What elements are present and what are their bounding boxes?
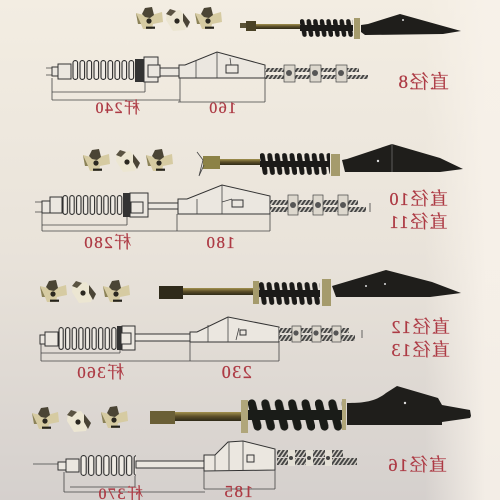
label: diameter 13: 直径13	[390, 340, 450, 360]
label: 180: 180	[205, 233, 235, 252]
label: diameter 16: 直径16	[387, 455, 447, 475]
label: rod 240: 杆240	[94, 99, 140, 117]
panel: diameter 16	[32, 386, 471, 500]
icon: clamps row 4	[32, 406, 128, 432]
icon: clamps row 1	[136, 7, 222, 31]
label: diameter 8: 直径8	[397, 71, 449, 93]
panel: diameter 10 and 11	[35, 144, 463, 252]
label: 230: 230	[220, 362, 252, 382]
icon: clamps row 2	[83, 149, 173, 172]
icon: clamps row 3	[40, 280, 130, 303]
label: 160: 160	[208, 100, 236, 117]
drawing: anchor row 4	[33, 441, 357, 492]
label: diameter 12: 直径12	[390, 317, 450, 337]
label: rod 360: 杆360	[76, 363, 124, 382]
photo: anchor row 3	[159, 270, 461, 306]
label: diameter 11: 直径11	[388, 212, 448, 232]
label: diameter 10: 直径10	[388, 189, 448, 209]
panel: diameter 12 and 13	[40, 270, 461, 382]
photo: anchor row 4	[150, 386, 471, 433]
photo: anchor row 1	[240, 14, 461, 39]
label: rod 280: 杆280	[83, 233, 131, 252]
drawing: anchor row 2	[35, 185, 370, 231]
panel: diameter 8	[46, 7, 461, 117]
drawing: anchor row 3	[40, 317, 362, 361]
photo: anchor row 2	[197, 144, 463, 176]
drawing: anchor row 1	[46, 52, 368, 102]
